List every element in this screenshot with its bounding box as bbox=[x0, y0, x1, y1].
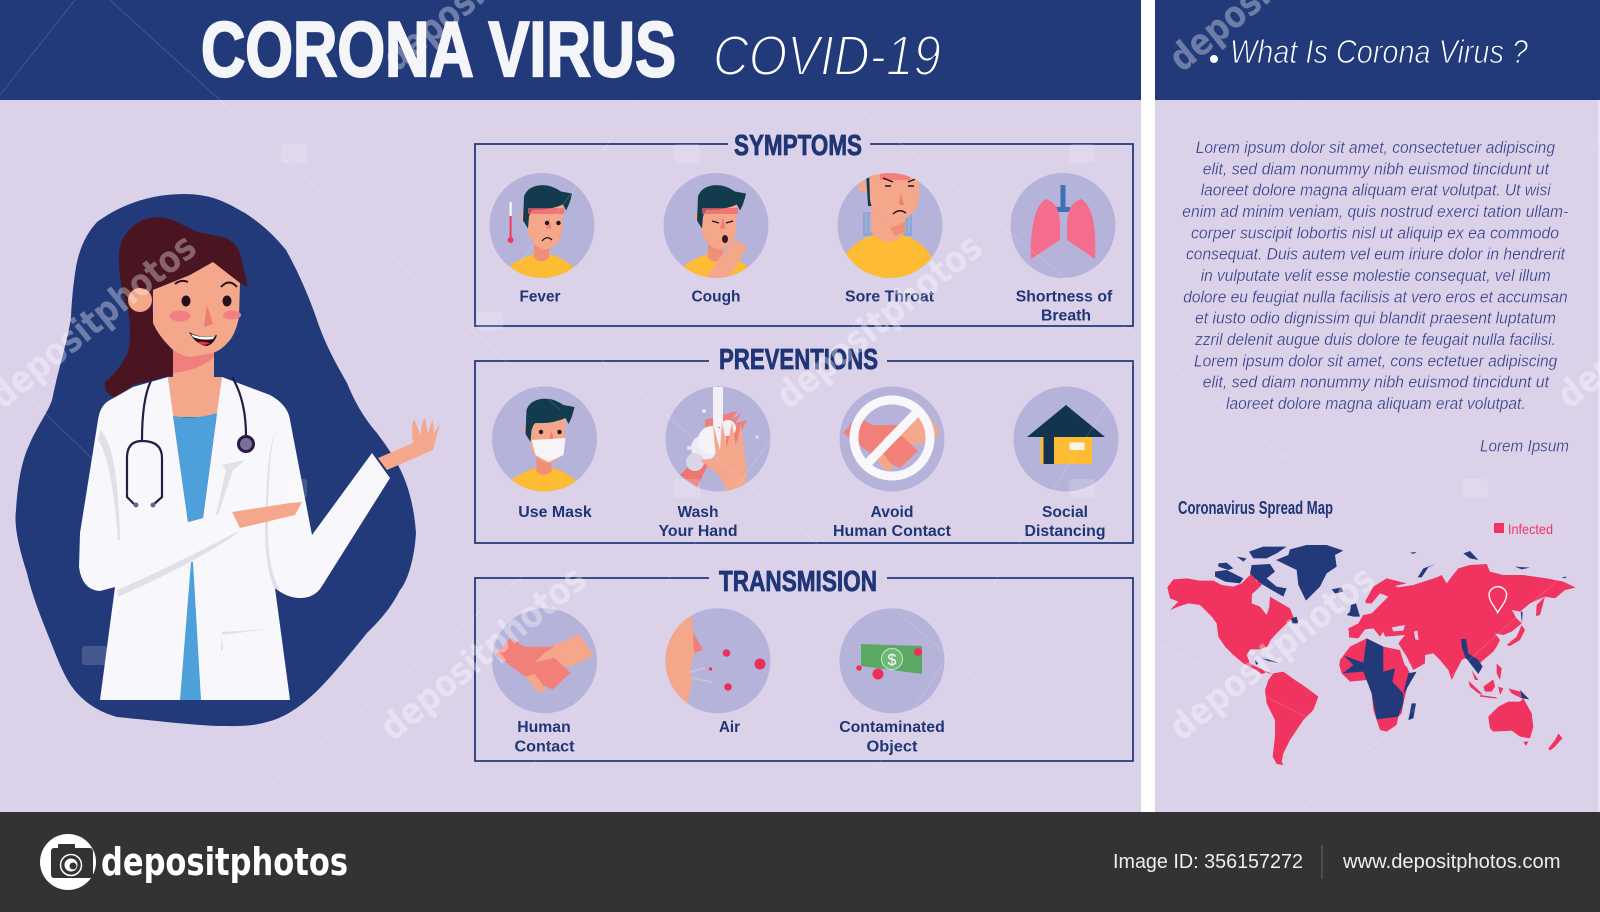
transmission heading: TRANSMISION bbox=[719, 566, 877, 598]
social distancing label: Social bbox=[1042, 504, 1088, 521]
icon: lungs bbox=[1010, 173, 1116, 278]
icon: human contact bbox=[492, 608, 597, 713]
icon: contaminated object bbox=[840, 608, 944, 713]
footer logo icon bbox=[40, 834, 96, 890]
doctor raised hand bbox=[378, 418, 440, 470]
panel: transmission bbox=[475, 566, 1133, 761]
paragraph text block bbox=[1182, 138, 1569, 413]
panel: symptoms bbox=[475, 130, 1133, 326]
paragraph text block: dolore eu feugiat nulla facilisis at vero eros et accumsan bbox=[1183, 287, 1568, 306]
doctor coat bbox=[79, 377, 390, 700]
cough label: Cough bbox=[692, 288, 740, 306]
doctor neck bbox=[173, 345, 214, 395]
paragraph text block: laoreet dolore magna aliquam erat volutpat. bbox=[1226, 394, 1526, 413]
icon: air bbox=[666, 608, 770, 714]
title: CORONA VIRUS bbox=[201, 5, 676, 93]
icon: social distancing house bbox=[1014, 386, 1118, 492]
avoid human contact label: Human Contact bbox=[833, 523, 952, 540]
map heading: Coronavirus Spread Map bbox=[1178, 498, 1333, 518]
footer image id: Image ID: 356157272 bbox=[1113, 851, 1303, 873]
paragraph text block: et iusto odio dignissim qui blandit praesent luptatum bbox=[1195, 309, 1556, 328]
shortness of breath label: Shortness of bbox=[1016, 288, 1113, 306]
map: uninfected regions bbox=[1215, 545, 1567, 720]
watermark: depositphotos text: depositphotos bbox=[1161, 557, 1384, 749]
footer bar bbox=[0, 812, 1600, 912]
shortness of breath label: Breath bbox=[1041, 308, 1091, 324]
doctor ear bbox=[128, 288, 152, 312]
icon: use mask bbox=[492, 386, 597, 499]
map pin bbox=[1489, 587, 1507, 613]
symptoms frame bbox=[475, 144, 1133, 326]
paragraph text block: elit, sed diam nonummy nibh euismod tincidunt ut bbox=[1203, 373, 1550, 392]
map legend: infected: Infected bbox=[1508, 521, 1553, 537]
footer divider bbox=[1321, 845, 1323, 879]
watermark: depositphotos text: depositphotos bbox=[372, 557, 595, 749]
doctor near hand bbox=[232, 502, 302, 528]
paragraph signature: Lorem Ipsum bbox=[1480, 436, 1569, 456]
paragraph text block: Lorem ipsum dolor sit amet, consectetuer adipiscing bbox=[1196, 138, 1555, 157]
human contact label: Contact bbox=[514, 738, 575, 756]
icon: contaminated object: $ bbox=[888, 652, 897, 669]
avoid human contact label: Avoid bbox=[870, 504, 914, 521]
right edge strip bbox=[1598, 100, 1600, 812]
white gutter bbox=[1141, 0, 1155, 812]
wash your hand label: Your Hand bbox=[658, 523, 738, 540]
contaminated object label: Contaminated bbox=[839, 719, 945, 736]
footer url: www.depositphotos.com bbox=[1342, 851, 1560, 873]
icon: fever bbox=[490, 173, 594, 286]
doctor illustration bbox=[15, 194, 440, 726]
shortness of breath label bbox=[1016, 288, 1113, 324]
social distancing label: Distancing bbox=[1024, 523, 1106, 540]
symptoms heading: SYMPTOMS bbox=[734, 130, 862, 162]
human contact label: Human bbox=[517, 719, 571, 736]
wash your hand label: Wash bbox=[678, 504, 718, 521]
wash your hand label bbox=[658, 504, 738, 540]
doctor mouth bbox=[189, 332, 217, 346]
sore throat label: Sore Throat bbox=[845, 288, 935, 306]
coat shadows bbox=[98, 428, 280, 650]
footer logo wordmark: depositphotos bbox=[101, 840, 348, 884]
doctor eyes and brows bbox=[175, 281, 237, 306]
map: infected regions bbox=[1167, 564, 1576, 765]
watermark: camera marks bbox=[82, 144, 1488, 665]
doctor nose bbox=[204, 305, 213, 327]
doctor chest bbox=[168, 377, 222, 417]
icon: wash hand bbox=[666, 386, 770, 494]
social distancing label bbox=[1024, 504, 1106, 540]
subtitle: COVID-19 bbox=[713, 24, 941, 88]
preventions heading: PREVENTIONS bbox=[719, 344, 878, 376]
paragraph text block: laoreet dolore magna aliquam erat volutpat. Ut wisi bbox=[1201, 181, 1552, 200]
transmission frame bbox=[475, 578, 1133, 761]
air label: Air bbox=[719, 719, 740, 736]
paragraph text block: in vulputate velit esse molestie consequat, vel illum bbox=[1201, 266, 1551, 285]
icon: sore throat bbox=[838, 173, 942, 278]
paragraph text block: consequat. Duis autem vel eum iriure dolor in hendrerit bbox=[1186, 245, 1566, 264]
icon: avoid human contact bbox=[840, 386, 944, 492]
preventions frame bbox=[475, 361, 1133, 543]
watermark: depositphotos text: depositphotos bbox=[768, 225, 991, 417]
icon: cough bbox=[664, 173, 768, 286]
paragraph text block: Lorem ipsum dolor sit amet, cons ectetuer adipiscing bbox=[1194, 351, 1558, 370]
doctor face bbox=[153, 262, 240, 357]
doctor hair bbox=[105, 217, 248, 398]
stethoscope bbox=[127, 377, 254, 508]
panel: preventions bbox=[475, 344, 1133, 543]
fever label: Fever bbox=[520, 288, 560, 306]
doctor cheeks bbox=[170, 310, 241, 322]
avoid human contact label bbox=[833, 504, 952, 540]
paragraph text block: enim ad minim veniam, quis nostrud exerci tation ullam- bbox=[1182, 202, 1569, 221]
world map bbox=[1167, 545, 1576, 765]
map: inland seas bbox=[1392, 625, 1419, 667]
header bar: side bbox=[1155, 0, 1600, 100]
doctor shirt bbox=[173, 413, 217, 700]
use mask label: Use Mask bbox=[518, 504, 592, 521]
contaminated object label: Object bbox=[866, 738, 918, 756]
side heading: What Is Corona Virus ? bbox=[1230, 33, 1529, 70]
human contact label bbox=[514, 719, 575, 756]
paragraph text block: zzril delenit augue duis dolore te feugait nulla facilisi. bbox=[1194, 330, 1556, 349]
doctor background blob bbox=[15, 194, 416, 726]
contaminated object label bbox=[839, 719, 945, 756]
header bar: main bbox=[0, 0, 1141, 100]
paragraph text block: corper suscipit lobortis nisl ut aliquip ex ea commodo bbox=[1191, 223, 1559, 242]
paragraph text block: elit, sed diam nonummy nibh euismod tincidunt ut bbox=[1203, 159, 1550, 178]
